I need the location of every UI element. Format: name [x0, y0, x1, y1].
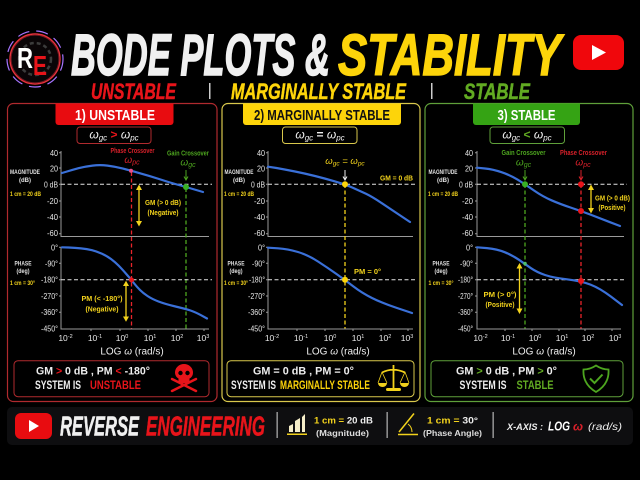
x-axis note: LOG: [548, 418, 570, 434]
frequency axis labels: 0: [333, 334, 336, 340]
magnitude axis labels: -20: [462, 197, 474, 206]
magnitude axis labels: [428, 149, 474, 238]
magnitude chart: [59, 151, 212, 329]
frequency axis labels: 0: [538, 334, 541, 340]
phase axis labels: PHASE: [228, 262, 244, 268]
phase axis labels: 1 cm = 30°: [224, 281, 248, 287]
phase margin arrow and label: PM (< -180°): [82, 294, 123, 303]
gain crossover label and arrow: gc: [188, 162, 196, 169]
verdict box: unstable: UNSTABLE: [90, 380, 141, 392]
phase axis labels: -360°: [41, 308, 58, 317]
phase chart: [266, 247, 415, 331]
frequency axis labels: 3: [618, 334, 621, 340]
verdict box: marginally stable: [227, 361, 414, 397]
condition: wgc greater than wpc: ω: [121, 128, 130, 142]
condition: wgc equals wpc: ω: [327, 128, 336, 142]
frequency axis labels: 10: [582, 333, 591, 343]
magnitude axis labels: MAGNITUDE: [10, 170, 40, 176]
condition: wgc greater than wpc: pc: [129, 134, 139, 142]
condition: wgc less than wpc: ω: [502, 128, 512, 142]
frequency axis labels: 2: [591, 334, 594, 340]
title: BODE PLOTS &: [71, 23, 330, 88]
x-axis note: [506, 418, 622, 434]
condition: wgc less than wpc: pc: [542, 134, 552, 142]
frequency axis labels: 10: [379, 333, 388, 343]
magnitude axis labels: 20: [257, 164, 265, 174]
crossover label and arrow: = ω: [340, 156, 358, 167]
gain crossover label and arrow: [167, 150, 209, 180]
condition: wgc equals wpc: ω: [295, 128, 305, 142]
panel heading: 2) MARGINALLY STABLE: [243, 104, 401, 125]
panel: unstable: [8, 104, 217, 402]
phase margin arrow and label: PM (> 0°): [484, 290, 517, 299]
condition: wgc less than wpc: [490, 127, 564, 144]
condition: wgc greater than wpc: [77, 127, 151, 144]
verdict box: marginally stable: SYSTEM IS: [231, 380, 276, 392]
brand name: [60, 410, 265, 442]
frequency axis labels: 10: [58, 333, 68, 343]
frequency axis labels: 10: [501, 333, 510, 343]
logo: RE gear emblem: E: [33, 50, 47, 81]
brand name: REVERSE: [60, 410, 140, 442]
scale note: phase angle: (Phase Angle): [423, 428, 482, 438]
subtitle row: UNSTABLE: [91, 79, 177, 104]
condition: wgc equals wpc: [282, 127, 357, 144]
subtitle row: STABLE: [464, 79, 531, 104]
phase axis labels: -180°: [249, 276, 265, 284]
phase axis labels: 1 cm = 30°: [10, 281, 36, 287]
icon: balance scale: [378, 365, 409, 391]
subtitle row: MARGINALLY STABLE: [231, 79, 407, 104]
condition: wgc less than wpc: gc: [512, 134, 520, 142]
frequency axis labels: [473, 333, 621, 358]
frequency axis labels: [265, 333, 413, 358]
magnitude axis labels: (dB): [437, 178, 449, 184]
frequency axis labels: -1: [303, 334, 308, 340]
gain margin arrow and label: [136, 184, 181, 226]
phase axis labels: (deg): [230, 269, 242, 275]
magnitude chart: [475, 151, 627, 329]
magnitude axis labels: -60: [462, 229, 474, 238]
scale note: phase angle: [423, 416, 482, 438]
magnitude axis labels: 40: [257, 149, 265, 158]
phase axis labels: -90°: [252, 260, 265, 268]
magnitude axis labels: MAGNITUDE: [224, 170, 254, 176]
phase axis labels: -180°: [41, 276, 58, 284]
brand name: ENGINEERING: [146, 410, 265, 442]
frequency axis labels: 1: [565, 334, 568, 340]
gain crossover label and arrow: ω: [180, 158, 188, 168]
x-axis note: X-AXIS :: [506, 422, 543, 433]
frequency axis labels: 10: [171, 333, 180, 343]
frequency axis labels: 10: [324, 333, 333, 343]
phase axis labels: [224, 244, 265, 334]
phase crossover label and arrow: Phase Crossover: [560, 150, 607, 157]
magnitude axis labels: (dB): [233, 178, 245, 184]
frequency axis labels: 2: [388, 334, 391, 340]
icon: magnitude bars: [287, 414, 307, 435]
title: STABILITY: [338, 23, 565, 88]
frequency axis labels: 10: [556, 333, 565, 343]
magnitude axis labels: (dB): [19, 178, 31, 184]
frequency axis labels: 10: [144, 333, 153, 343]
phase crossover label: pc: [131, 160, 140, 166]
subtitle row: [91, 79, 531, 104]
frequency axis labels: 10: [294, 333, 303, 343]
phase chart: [59, 247, 212, 331]
frequency axis labels: LOG ω (rad/s): [100, 346, 164, 358]
magnitude axis labels: -60: [254, 229, 266, 238]
icon: YouTube play button: [573, 35, 624, 70]
frequency axis labels: 2: [180, 334, 183, 340]
x-axis note: ω: [573, 420, 583, 434]
verdict box: stable: [431, 361, 623, 397]
phase axis labels: -90°: [460, 260, 473, 268]
magnitude chart: [266, 151, 415, 329]
crossover label and arrow: [325, 156, 365, 180]
frequency axis labels: 10: [529, 333, 538, 343]
phase axis labels: -360°: [458, 308, 473, 317]
phase crossover label: Phase Crossover: [110, 148, 155, 155]
panel: stable: [425, 104, 633, 402]
frequency axis labels: 3: [206, 334, 209, 340]
frequency axis labels: 10: [116, 333, 125, 343]
gain margin arrow and label: (Negative): [148, 208, 179, 217]
crossover label and arrow: pc: [357, 160, 365, 168]
gain margin label: GM = 0 dB: [380, 174, 414, 182]
magnitude axis labels: 0 dB: [459, 180, 473, 190]
icon: shield with check: [583, 366, 609, 392]
magnitude axis labels: -40: [462, 213, 474, 222]
phase axis labels: [428, 244, 473, 334]
condition: wgc equals wpc: gc: [305, 134, 313, 142]
phase axis labels: -360°: [248, 308, 265, 317]
phase axis labels: -450°: [248, 324, 265, 334]
phase axis labels: -270°: [248, 292, 265, 301]
x-axis note: (rad/s): [588, 422, 622, 433]
gain margin arrow and label: GM (> 0 dB): [145, 198, 181, 207]
verdict box: marginally stable: GM = 0 dB , PM = 0°: [253, 366, 354, 378]
gain margin arrow and label: [588, 184, 630, 214]
frequency axis labels: LOG ω (rad/s): [306, 346, 370, 358]
frequency axis labels: 10: [88, 333, 97, 343]
magnitude axis labels: -40: [47, 213, 59, 222]
panel heading: 3) STABLE: 3) STABLE: [498, 107, 556, 124]
phase axis labels: PHASE: [432, 262, 450, 268]
frequency axis labels: 10: [473, 333, 483, 343]
magnitude axis labels: -20: [47, 197, 59, 206]
panel heading: 2) MARGINALLY STABLE: 2) MARGINALLY STABLE: [254, 107, 390, 124]
phase axis labels: 0°: [466, 244, 473, 252]
magnitude axis labels: 0 dB: [251, 180, 265, 190]
phase margin arrow and label: (Negative): [86, 304, 119, 314]
frequency axis labels: 10: [609, 333, 618, 343]
magnitude axis labels: -20: [254, 197, 266, 206]
condition: wgc less than wpc: <: [520, 128, 534, 142]
frequency axis labels: [58, 333, 209, 358]
phase margin arrow and label: [82, 281, 129, 322]
phase chart: [475, 247, 626, 331]
scale note: magnitude: [314, 416, 373, 438]
frequency axis labels: 10: [265, 333, 274, 343]
icon: YouTube play button: [15, 413, 52, 439]
gain crossover label and arrow: Gain Crossover: [167, 150, 209, 158]
frequency axis labels: 10: [197, 333, 206, 343]
icon: skull and crossbones: [172, 364, 196, 391]
phase axis labels: (deg): [16, 269, 30, 275]
condition: wgc greater than wpc: ω: [89, 128, 99, 142]
phase axis labels: [10, 244, 58, 334]
frequency axis labels: 10: [401, 333, 410, 343]
phase axis labels: -180°: [458, 276, 473, 284]
crossover label and arrow: ω: [325, 156, 333, 167]
phase axis labels: -450°: [458, 324, 473, 334]
verdict box: unstable: SYSTEM IS: [35, 380, 81, 392]
crossover label and arrow: gc: [333, 160, 340, 168]
phase axis labels: -450°: [41, 324, 58, 334]
phase axis labels: 0°: [258, 244, 265, 252]
icon: phase angle: [398, 414, 418, 434]
frequency axis labels: -2: [68, 334, 73, 340]
condition: wgc equals wpc: =: [313, 128, 327, 142]
phase crossover label and arrow: pc: [582, 162, 591, 169]
magnitude axis labels: [10, 149, 59, 238]
gain crossover label and arrow: [502, 150, 546, 180]
gain margin arrow and label: (Positive): [598, 203, 626, 212]
logo: RE gear emblem: [7, 31, 63, 87]
magnitude axis labels: -60: [47, 229, 59, 238]
condition: wgc less than wpc: ω: [534, 128, 543, 142]
phase axis labels: 1 cm = 30°: [428, 281, 454, 287]
condition: wgc greater than wpc: gc: [99, 134, 107, 142]
panel heading: 1) UNSTABLE: [56, 104, 174, 125]
magnitude axis labels: 0 dB: [44, 180, 58, 190]
frequency axis labels: 3: [410, 334, 413, 340]
frequency axis labels: 1: [361, 334, 364, 340]
phase axis labels: -90°: [45, 260, 58, 268]
frequency axis labels: -1: [97, 334, 102, 340]
phase crossover label and arrow: [560, 150, 607, 180]
magnitude axis labels: MAGNITUDE: [428, 170, 458, 176]
scale note: magnitude: 1 cm = 20 dB: [314, 416, 373, 426]
frequency axis labels: 10: [352, 333, 361, 343]
logo: RE gear emblem: R: [17, 43, 33, 75]
panel heading: 1) UNSTABLE: 1) UNSTABLE: [75, 107, 155, 124]
verdict box: marginally stable: MARGINALLY STABLE: [280, 380, 370, 392]
phase crossover label: [110, 148, 155, 166]
magnitude axis labels: 40: [465, 149, 473, 158]
panel: marginally stable: [222, 104, 420, 402]
frequency axis labels: -2: [483, 334, 488, 340]
phase crossover label and arrow: ω: [575, 158, 583, 168]
magnitude axis labels: 40: [50, 149, 58, 158]
verdict box: stable: GM > 0 dB , PM > 0°: [456, 366, 557, 378]
gain margin arrow and label: GM (> 0 dB): [595, 194, 630, 202]
phase axis labels: (deg): [434, 269, 448, 275]
phase margin label: PM = 0°: [354, 267, 381, 276]
verdict box: stable: SYSTEM IS: [460, 380, 507, 392]
gain crossover label and arrow: ω: [516, 158, 524, 168]
magnitude axis labels: 1 cm = 20 dB: [224, 192, 255, 198]
footer bar: [7, 407, 633, 445]
magnitude axis labels: [224, 149, 266, 238]
phase axis labels: 0°: [51, 244, 58, 252]
magnitude axis labels: -40: [254, 213, 266, 222]
verdict box: unstable: [14, 361, 209, 397]
frequency axis labels: LOG ω (rad/s): [512, 346, 576, 358]
panel heading: 3) STABLE: [473, 104, 580, 125]
condition: wgc equals wpc: pc: [335, 134, 345, 142]
gain crossover label and arrow: Gain Crossover: [502, 150, 546, 157]
phase axis labels: PHASE: [14, 262, 32, 268]
verdict box: unstable: GM > 0 dB , PM < -180°: [36, 366, 150, 378]
condition: wgc greater than wpc: >: [107, 128, 121, 142]
magnitude axis labels: 1 cm = 20 dB: [10, 192, 42, 198]
scale note: phase angle: 1 cm = 30°: [427, 416, 478, 426]
phase margin arrow and label: [484, 263, 522, 314]
frequency axis labels: -2: [274, 334, 279, 340]
verdict box: stable: STABLE: [516, 380, 554, 392]
magnitude axis labels: 20: [50, 164, 58, 174]
frequency axis labels: 0: [125, 334, 128, 340]
frequency axis labels: 1: [153, 334, 156, 340]
phase axis labels: -270°: [458, 292, 473, 301]
frequency axis labels: -1: [510, 334, 515, 340]
gain crossover label and arrow: gc: [524, 162, 532, 169]
phase margin arrow and label: (Positive): [486, 300, 515, 309]
phase axis labels: -270°: [41, 292, 58, 301]
magnitude axis labels: 1 cm = 20 dB: [428, 192, 459, 198]
phase crossover label: ω: [124, 155, 132, 166]
scale note: magnitude: (Magnitude): [316, 428, 369, 438]
magnitude axis labels: 20: [465, 164, 473, 174]
